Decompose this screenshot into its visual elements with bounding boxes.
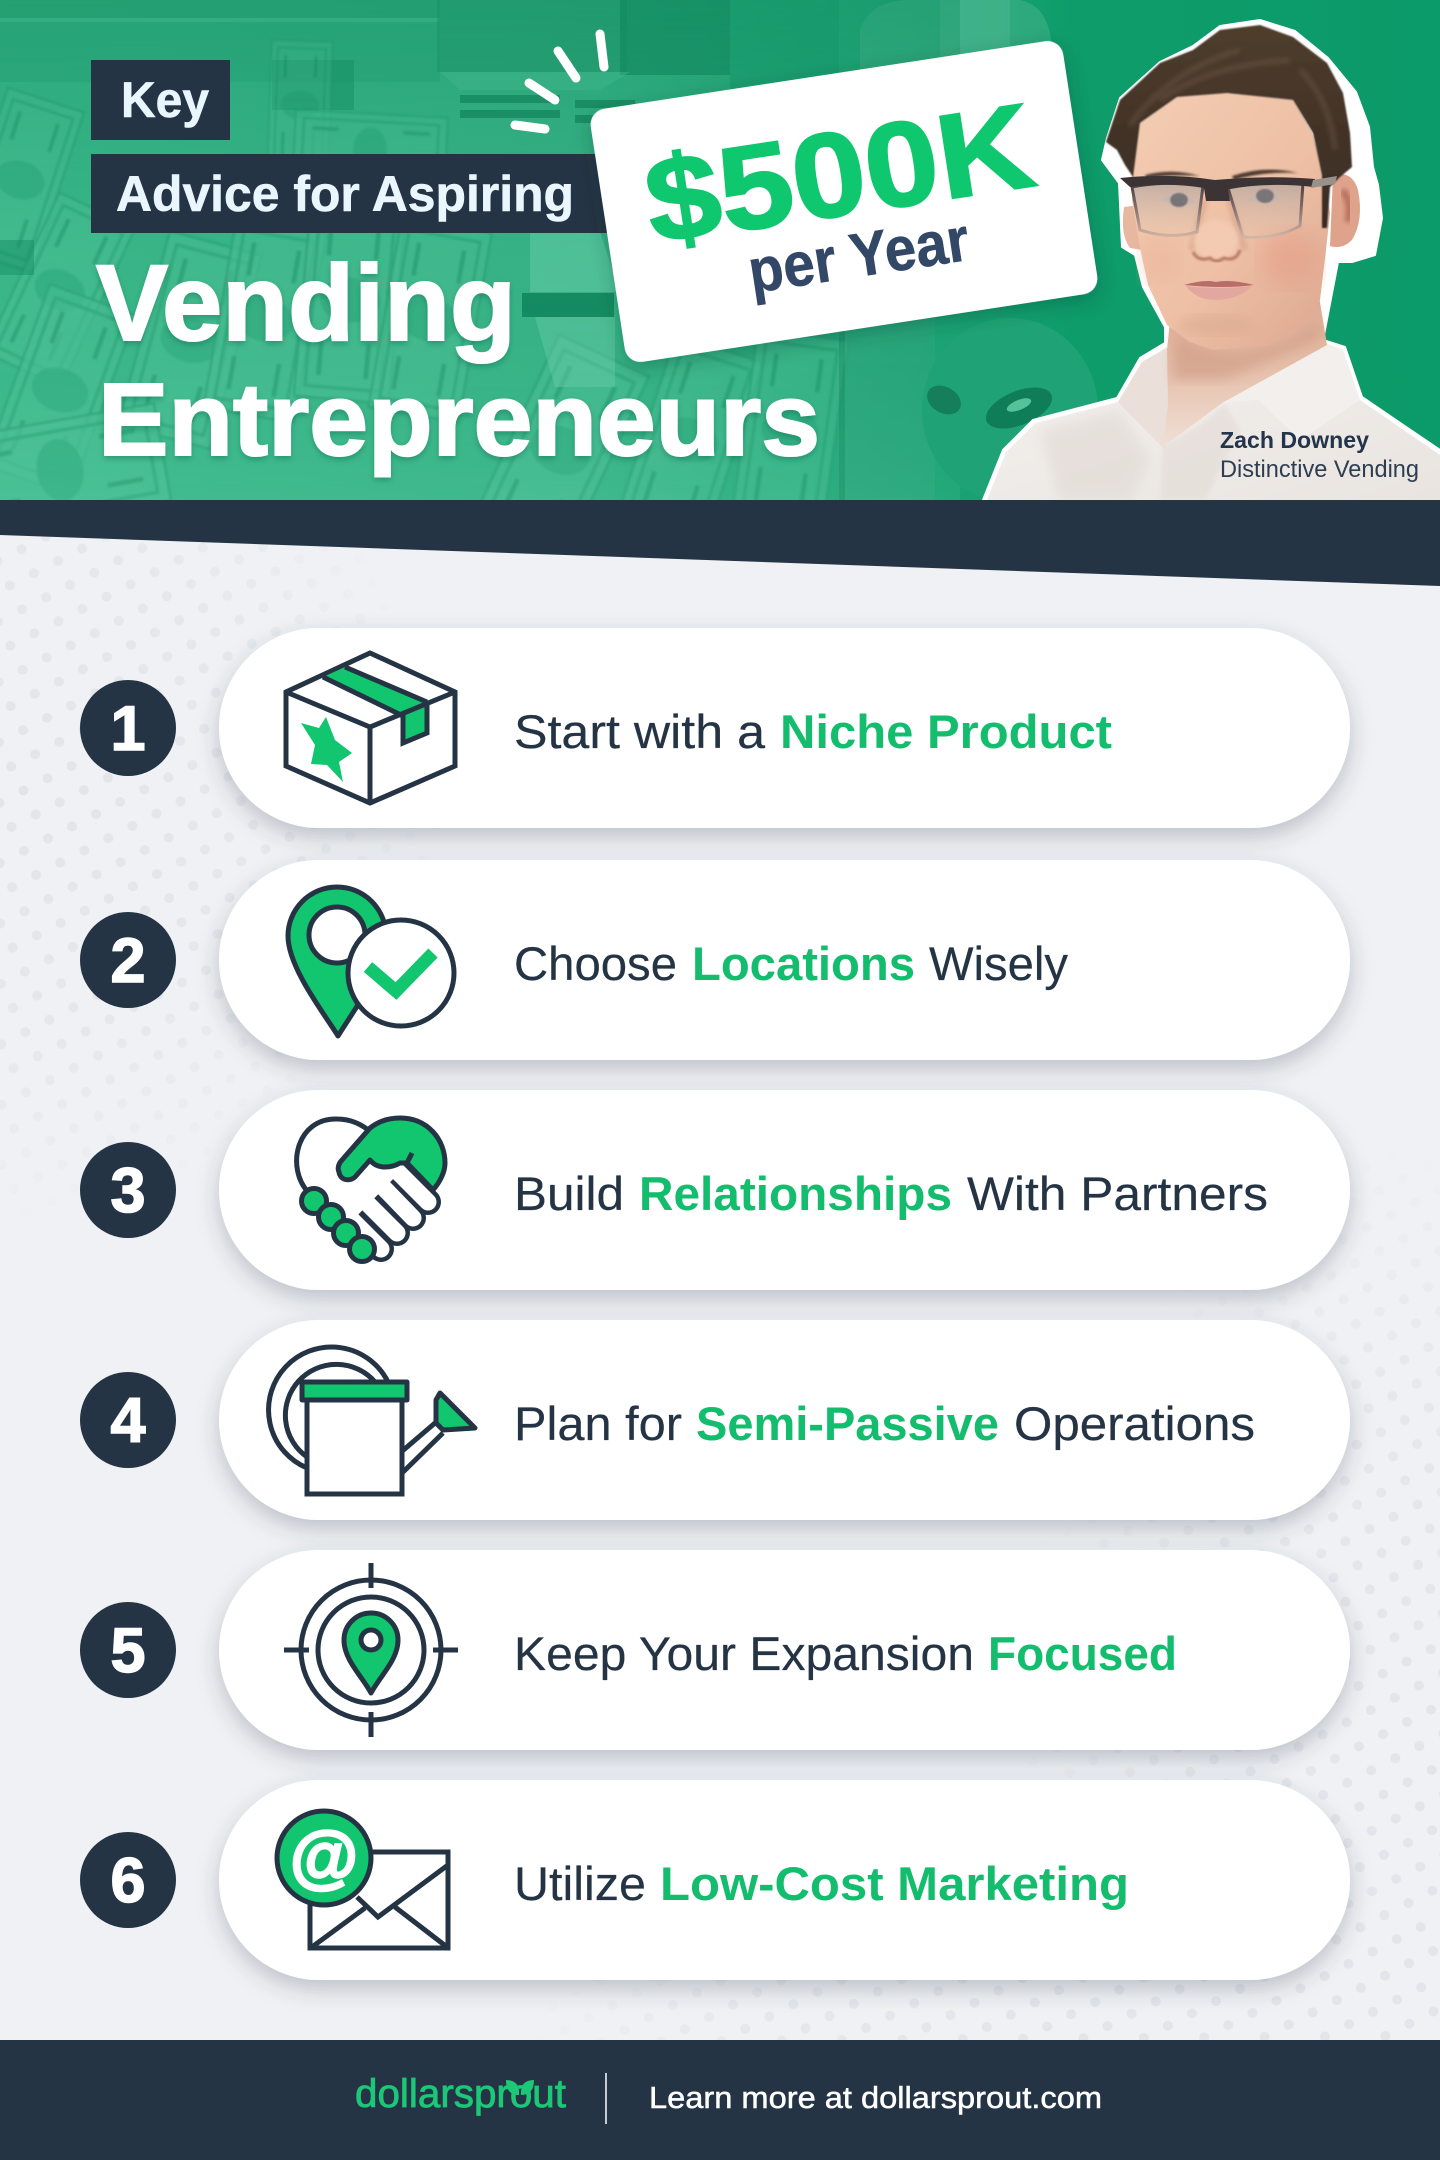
header title block bbox=[91, 60, 820, 477]
list row 3 bbox=[80, 1090, 1350, 1290]
number badge 3 bbox=[80, 1142, 176, 1238]
pill 1 bbox=[219, 628, 1350, 828]
icon: location pin with check bbox=[288, 887, 454, 1036]
number badge 5: 5 bbox=[110, 1616, 146, 1686]
list row 2 bbox=[80, 860, 1350, 1060]
footer link text: Learn more at dollarsprout.com bbox=[649, 2080, 1102, 2115]
text 5: Focused bbox=[988, 1627, 1177, 1680]
number badge 4: 4 bbox=[110, 1386, 146, 1456]
pill 4 bbox=[219, 1320, 1350, 1520]
left ear bbox=[1123, 205, 1142, 250]
callout card: $500K per Year: per Year bbox=[744, 205, 974, 307]
number badge 4 bbox=[80, 1372, 176, 1468]
list row 5 bbox=[80, 1550, 1350, 1750]
name caption: Distinctive Vending bbox=[1220, 456, 1419, 483]
title: Vending Entrepreneurs: Entrepreneurs bbox=[98, 362, 820, 477]
dark slanted band bbox=[0, 500, 1440, 586]
text 3: Build bbox=[514, 1167, 624, 1220]
shirt bbox=[987, 343, 1440, 500]
number badge 2 bbox=[80, 912, 176, 1008]
title: Vending Entrepreneurs: Vending bbox=[96, 242, 516, 363]
text 6: Utilize bbox=[514, 1857, 646, 1910]
pill 3 bbox=[219, 1090, 1350, 1290]
label box: Key bbox=[91, 60, 230, 140]
facial shading bbox=[1140, 195, 1320, 335]
text 2 bbox=[514, 937, 1068, 990]
text 6: Low-Cost Marketing bbox=[660, 1857, 1129, 1910]
text 2: Locations bbox=[692, 937, 915, 990]
label box: Key: Key bbox=[121, 72, 209, 128]
icon: watering can bbox=[269, 1347, 475, 1494]
face bbox=[1132, 92, 1330, 350]
pill 6 bbox=[219, 1780, 1350, 1980]
number badge 6: 6 bbox=[110, 1846, 146, 1916]
number badge 1: 1 bbox=[110, 694, 146, 764]
icon: target with pin bbox=[284, 1563, 458, 1737]
callout card: $500K per Year bbox=[588, 39, 1100, 364]
lips bbox=[1184, 281, 1254, 300]
text 3: With Partners bbox=[967, 1167, 1268, 1220]
icon: email envelope: @ bbox=[290, 1817, 358, 1895]
name caption bbox=[1220, 427, 1419, 483]
list row 1 bbox=[80, 628, 1350, 828]
divider bbox=[605, 2073, 607, 2124]
spark lines bbox=[515, 34, 604, 129]
neck bbox=[1163, 290, 1327, 447]
alien toy head bbox=[922, 318, 1098, 502]
logo: dollarsprout: dollarsprout bbox=[355, 2072, 566, 2116]
text 1 bbox=[514, 705, 1112, 758]
text 4: Semi-Passive bbox=[696, 1397, 999, 1450]
number badge 3: 3 bbox=[110, 1156, 146, 1226]
number badge 5 bbox=[80, 1602, 176, 1698]
icon: star box bbox=[286, 653, 455, 803]
nose bbox=[1193, 220, 1240, 261]
title: Vending Entrepreneurs bbox=[96, 242, 820, 477]
pill 5 bbox=[219, 1550, 1350, 1750]
footer bar bbox=[0, 2040, 1440, 2160]
text 3 bbox=[514, 1167, 1268, 1220]
list row 4 bbox=[80, 1320, 1350, 1520]
background photo: vending machine and cash bbox=[0, 0, 1052, 500]
name caption: Zach Downey bbox=[1220, 427, 1369, 453]
icon: email envelope bbox=[277, 1811, 448, 1948]
number badge 2: 2 bbox=[110, 926, 146, 996]
number badge 6 bbox=[80, 1832, 176, 1928]
list row 6 bbox=[80, 1780, 1350, 1980]
text 5: Keep Your Expansion bbox=[514, 1627, 974, 1680]
number badge 1 bbox=[80, 680, 176, 776]
label box: Advice for Aspiring bbox=[91, 154, 621, 233]
eyes bbox=[1160, 189, 1282, 207]
icon: handshake heart bbox=[297, 1118, 445, 1262]
header photo banner bbox=[0, 0, 1440, 565]
text 4: Operations bbox=[1014, 1397, 1255, 1450]
text 3: Relationships bbox=[639, 1167, 952, 1220]
glasses bbox=[1120, 176, 1337, 238]
text 2: Wisely bbox=[929, 937, 1068, 990]
label box: Advice for Aspiring: Advice for Aspiring bbox=[116, 166, 574, 222]
right ear bbox=[1330, 174, 1360, 247]
callout card: $500K per Year: $500K bbox=[637, 78, 1042, 270]
text 4: Plan for bbox=[514, 1397, 682, 1450]
eyebrows bbox=[1145, 170, 1298, 180]
white cut-out outline bbox=[983, 20, 1440, 500]
text 5 bbox=[514, 1627, 1177, 1680]
text 1: Niche Product bbox=[780, 705, 1112, 758]
text 2: Choose bbox=[514, 937, 677, 990]
text 4 bbox=[514, 1397, 1255, 1450]
portrait: Zach Downey bbox=[983, 20, 1440, 500]
pill 2 bbox=[219, 860, 1350, 1060]
hair bbox=[1106, 25, 1352, 228]
text 1: Start with a bbox=[514, 705, 766, 758]
dot pattern background bbox=[0, 500, 1440, 2060]
